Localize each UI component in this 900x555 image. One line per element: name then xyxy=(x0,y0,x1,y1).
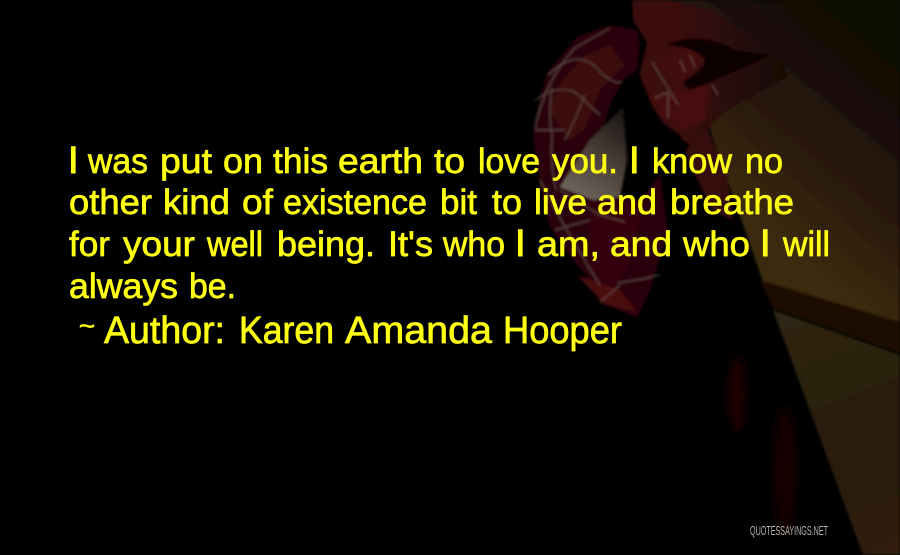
author attribution: Amanda xyxy=(345,310,493,352)
lips dark crease xyxy=(665,39,770,90)
line 1: I xyxy=(68,140,79,182)
line 2: bit xyxy=(440,183,477,222)
author attribution xyxy=(79,310,622,352)
line 1: no xyxy=(745,142,783,181)
strap xyxy=(760,280,900,353)
line 1: put xyxy=(160,142,212,181)
line 2 xyxy=(69,183,794,222)
line 3: It's xyxy=(388,225,433,264)
line 2: of xyxy=(242,183,273,222)
watermark: QUOTESSAYINGS.NET xyxy=(750,523,828,538)
line 3: who xyxy=(442,225,505,264)
lower lip strip xyxy=(680,130,733,220)
line 1: on xyxy=(223,142,263,181)
skin lower xyxy=(773,310,900,555)
lower mask glow xyxy=(730,357,797,535)
line 3: well xyxy=(206,225,263,264)
line 2: to xyxy=(492,183,522,222)
author attribution: Karen xyxy=(239,310,334,352)
line 1: know xyxy=(652,142,733,181)
line 3: who xyxy=(682,225,750,264)
author attribution: ~ xyxy=(79,313,95,340)
line 1: this xyxy=(273,142,328,181)
line 1: to xyxy=(434,142,465,181)
line 1: you. xyxy=(552,142,618,181)
line 3: and xyxy=(610,225,672,264)
line 3: for xyxy=(69,225,110,264)
line 2: kind xyxy=(163,183,230,222)
dark gap xyxy=(623,75,690,175)
line 3: will xyxy=(782,225,830,264)
line 1: love xyxy=(478,142,540,181)
line 1: I xyxy=(629,140,640,182)
line 2: other xyxy=(69,183,152,222)
line 1: earth xyxy=(338,142,423,181)
skin upper xyxy=(670,0,900,325)
author attribution: Hooper xyxy=(503,310,622,352)
line 3: am, xyxy=(537,225,600,264)
line 2: and xyxy=(597,183,657,222)
author attribution: Author: xyxy=(104,310,225,352)
line 3: I xyxy=(760,223,771,265)
quote text xyxy=(68,140,830,306)
mask lips xyxy=(632,0,787,143)
eye xyxy=(560,107,627,200)
line 2: live xyxy=(534,183,587,222)
line 4 xyxy=(69,267,236,306)
line 3: your xyxy=(123,225,195,264)
web lines xyxy=(535,28,718,302)
line 1 xyxy=(68,140,783,182)
photo: spider-man mask kiss xyxy=(533,0,900,555)
line 3: being. xyxy=(277,225,375,264)
mask left cheek xyxy=(533,25,668,318)
lips highlight xyxy=(655,40,705,85)
line 1: was xyxy=(87,142,148,181)
line 3 xyxy=(69,223,830,265)
line 2: breathe xyxy=(670,183,794,222)
line 2: existence xyxy=(283,183,427,222)
line 4: always xyxy=(69,267,178,306)
line 3: I xyxy=(515,223,526,265)
line 4: be. xyxy=(189,267,236,306)
red highlights xyxy=(548,45,625,140)
